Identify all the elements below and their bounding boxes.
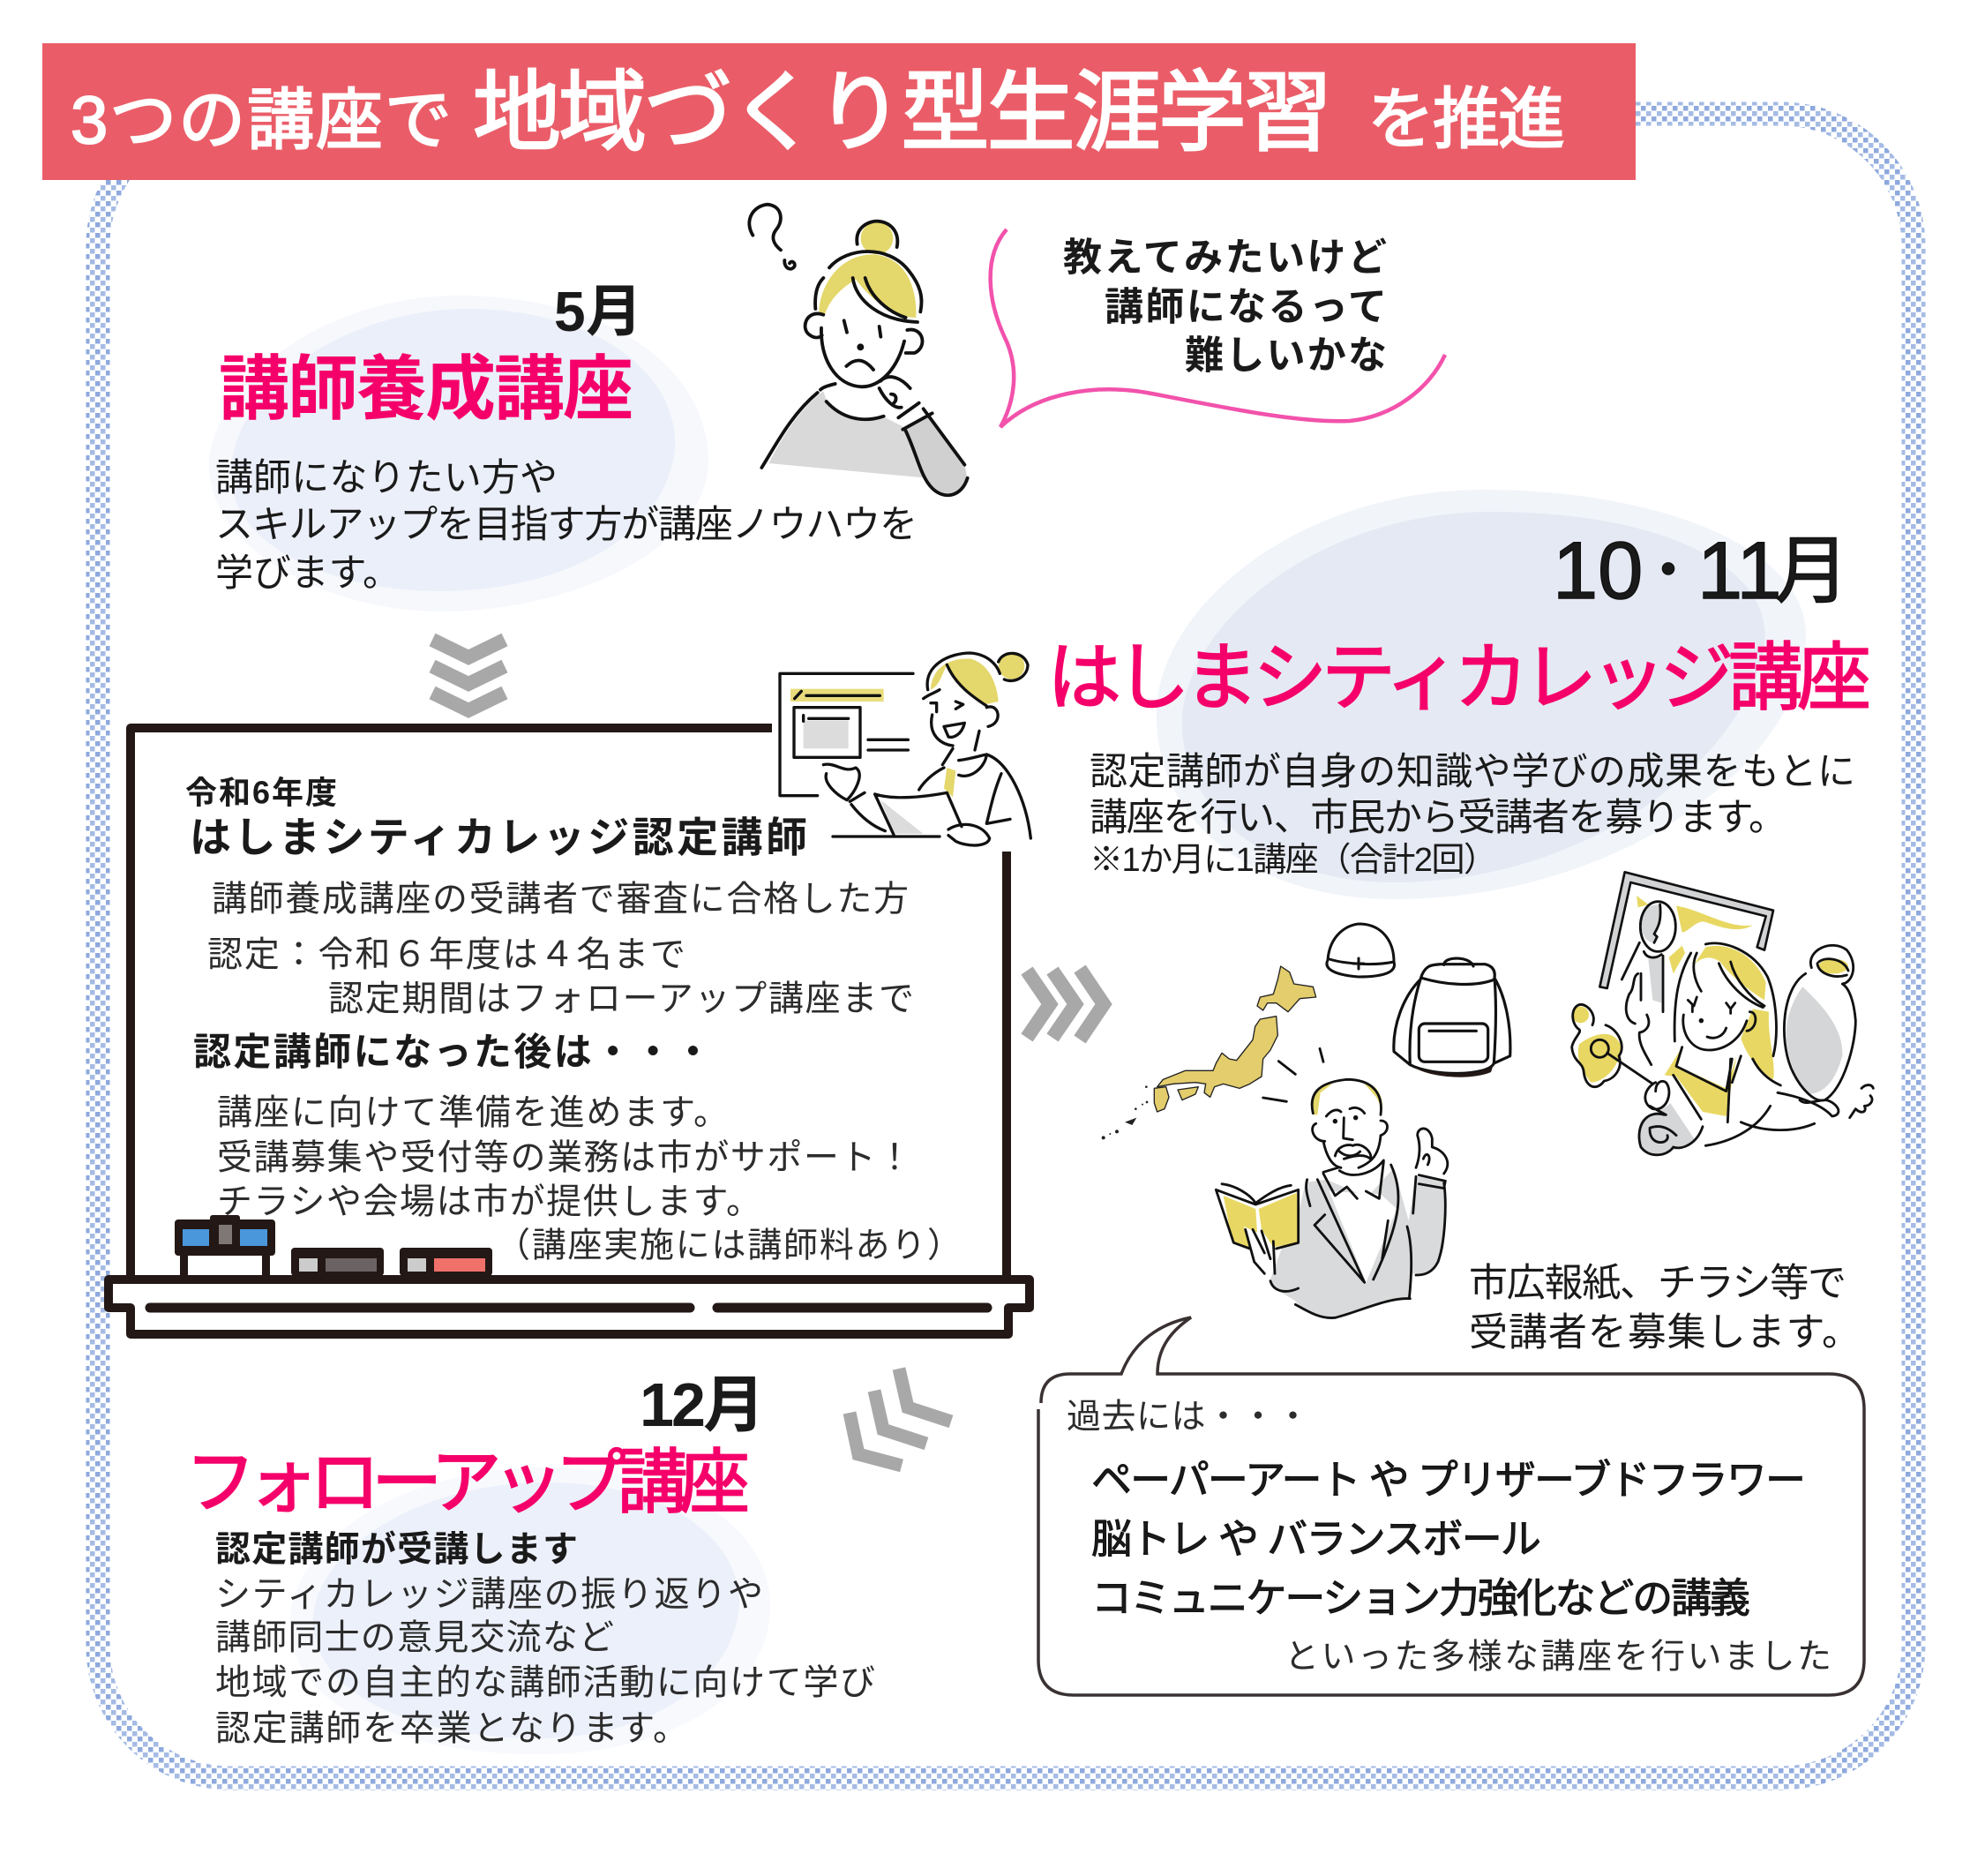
panel: follow-up course <box>185 1370 875 1754</box>
icon: woman with art objects <box>1572 872 1873 1156</box>
chalk tray slots <box>150 1302 987 1313</box>
month label: 10 <box>1553 526 1643 616</box>
month label: 月 <box>1775 529 1849 612</box>
description: 地域での自主的な講師活動に向けて学び <box>215 1663 875 1702</box>
text: recruitment note: 市広報紙、チラシ等で <box>1469 1262 1846 1304</box>
board certification text: 講師養成講座の受講者で審査に合格した方 <box>212 880 909 919</box>
icon: eraser blue <box>175 1215 275 1276</box>
speech bubble: 講師になるって <box>1105 286 1387 328</box>
description: 講座を行い、市民から受講者を募ります。 <box>1090 797 1786 839</box>
panel: certified instructor blackboard <box>109 728 1030 1334</box>
past courses list <box>1091 1457 1806 1621</box>
icon: thinking woman <box>749 205 968 495</box>
month label: 12月 <box>640 1370 765 1439</box>
description: 講師同士の意見交流など <box>215 1618 614 1657</box>
panel: teacher training course <box>209 280 918 612</box>
background blob <box>209 296 708 612</box>
speech bubble: 教えてみたいけど <box>1063 236 1387 279</box>
heading: はしまシティカレッジ講座 <box>1047 636 1871 719</box>
icon: presenting teacher <box>780 653 1030 845</box>
subheading: 認定講師が受講します <box>215 1530 578 1569</box>
past courses list: コミュニケーション力強化などの講義 <box>1091 1575 1750 1621</box>
past courses closing: といった多様な講座を行いました <box>1285 1638 1831 1677</box>
description: スキルアップを目指す方が講座ノウハウを <box>215 504 918 546</box>
icon: map of Japan <box>1102 966 1316 1139</box>
board subheading: 認定講師になった後は・・・ <box>193 1032 712 1074</box>
icon: eraser red <box>400 1248 492 1276</box>
background blob <box>290 1467 770 1754</box>
description <box>215 457 918 595</box>
description <box>1090 751 1855 879</box>
arrow: right chevrons <box>1027 969 1104 1039</box>
icon: backpack <box>1394 958 1510 1077</box>
panel: city college course <box>1047 490 1871 899</box>
icon: eraser grey <box>291 1248 384 1276</box>
board details <box>217 1093 962 1265</box>
icon: helmet <box>1327 924 1395 977</box>
board details: （講座実施には講師料あり） <box>496 1227 962 1265</box>
description: 学びます。 <box>215 552 401 595</box>
past courses list: ペーパーアート や プリザーブドフラワー <box>1091 1457 1806 1503</box>
board details: チラシや会場は市が提供します。 <box>217 1182 761 1221</box>
title banner <box>42 43 1636 180</box>
title banner: 3つの講座で <box>71 83 452 159</box>
board certification text: 認定期間はフォローアップ講座まで <box>328 979 914 1018</box>
heading: フォローアップ講座 <box>185 1444 750 1521</box>
description: 認定講師を卒業となります。 <box>215 1709 688 1748</box>
speech bubble: 難しいかな <box>1185 334 1387 378</box>
board heading: はしまシティカレッジ認定講師 <box>190 814 807 861</box>
month label: ・ <box>1641 540 1696 602</box>
icon: lecturer with book <box>1216 1048 1448 1318</box>
callout: past courses <box>1038 1317 1864 1695</box>
speech bubble <box>991 229 1445 427</box>
blackboard frame <box>109 728 1030 1334</box>
past courses intro: 過去には・・・ <box>1067 1398 1310 1437</box>
past courses list: 脳トレ や バランスボール <box>1091 1516 1541 1562</box>
arrow: down chevrons <box>432 640 505 710</box>
description <box>215 1575 875 1748</box>
background blob <box>1157 490 1806 899</box>
description: ※1か月に1講座（合計2回） <box>1090 842 1497 879</box>
month label: 5月 <box>554 280 642 343</box>
description: 認定講師が自身の知識や学びの成果をもとに <box>1090 751 1855 793</box>
arrow: back chevrons <box>850 1369 951 1466</box>
description: シティカレッジ講座の振り返りや <box>215 1575 763 1614</box>
board details: 受講募集や受付等の業務は市がサポート！ <box>217 1138 912 1177</box>
board details: 講座に向けて準備を進めます。 <box>217 1093 729 1132</box>
text: recruitment note: 受講者を募集します。 <box>1469 1311 1861 1354</box>
description: 講師になりたい方や <box>215 457 558 499</box>
board certification text: 認定：令和６年度は４名まで <box>207 935 685 974</box>
text: recruitment note <box>1469 1262 1861 1354</box>
title banner: 地域づくり型生涯学習 <box>473 64 1332 162</box>
month label: 11 <box>1697 526 1782 616</box>
board certification text <box>207 880 914 1018</box>
title banner: を推進 <box>1367 83 1565 157</box>
heading: 講師養成講座 <box>219 349 633 429</box>
board year label: 令和6年度 <box>185 775 337 810</box>
